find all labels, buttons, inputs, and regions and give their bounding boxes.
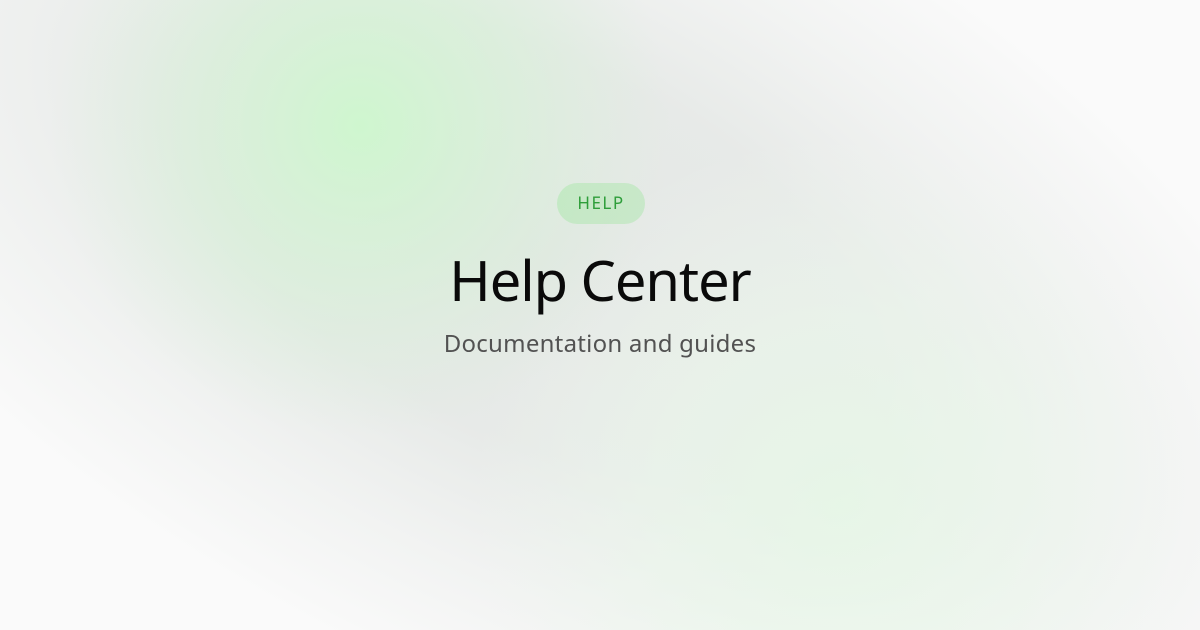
- title: Help Center: [449, 242, 751, 318]
- badge: HELP: [557, 183, 645, 224]
- subtitle: Documentation and guides: [444, 327, 756, 360]
- badge: HELP: HELP: [577, 191, 625, 214]
